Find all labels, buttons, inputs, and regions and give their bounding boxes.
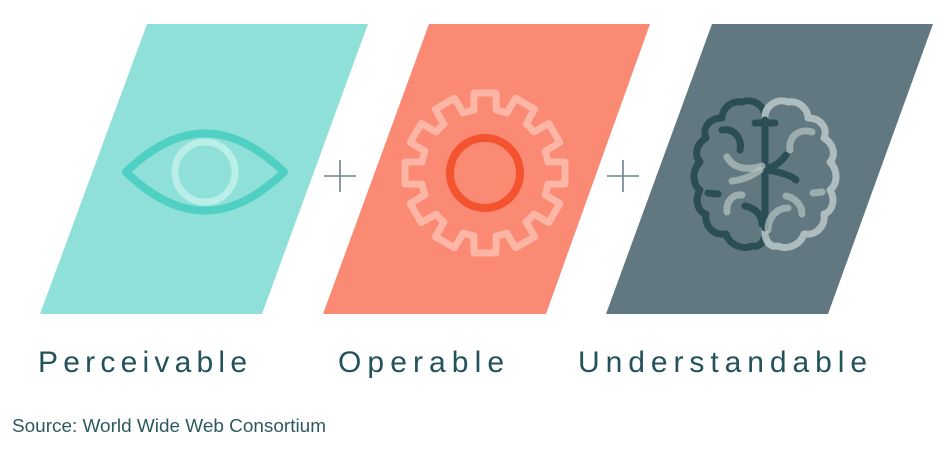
- icon: plus 1: [324, 160, 356, 192]
- panel: understandable: [606, 24, 933, 314]
- source note: Source: World Wide Web Consortium: [12, 416, 326, 436]
- label: Understandable: Understandable: [578, 346, 867, 379]
- label: Operable: Operable: [338, 346, 504, 379]
- icon: eye: [126, 134, 284, 210]
- icon: brain: [694, 101, 836, 248]
- icon: plus 2: [607, 160, 639, 192]
- label: Perceivable: Perceivable: [38, 346, 247, 379]
- panel: operable: [323, 24, 650, 314]
- icon: gear: [405, 93, 565, 253]
- panel: perceivable: [40, 24, 368, 314]
